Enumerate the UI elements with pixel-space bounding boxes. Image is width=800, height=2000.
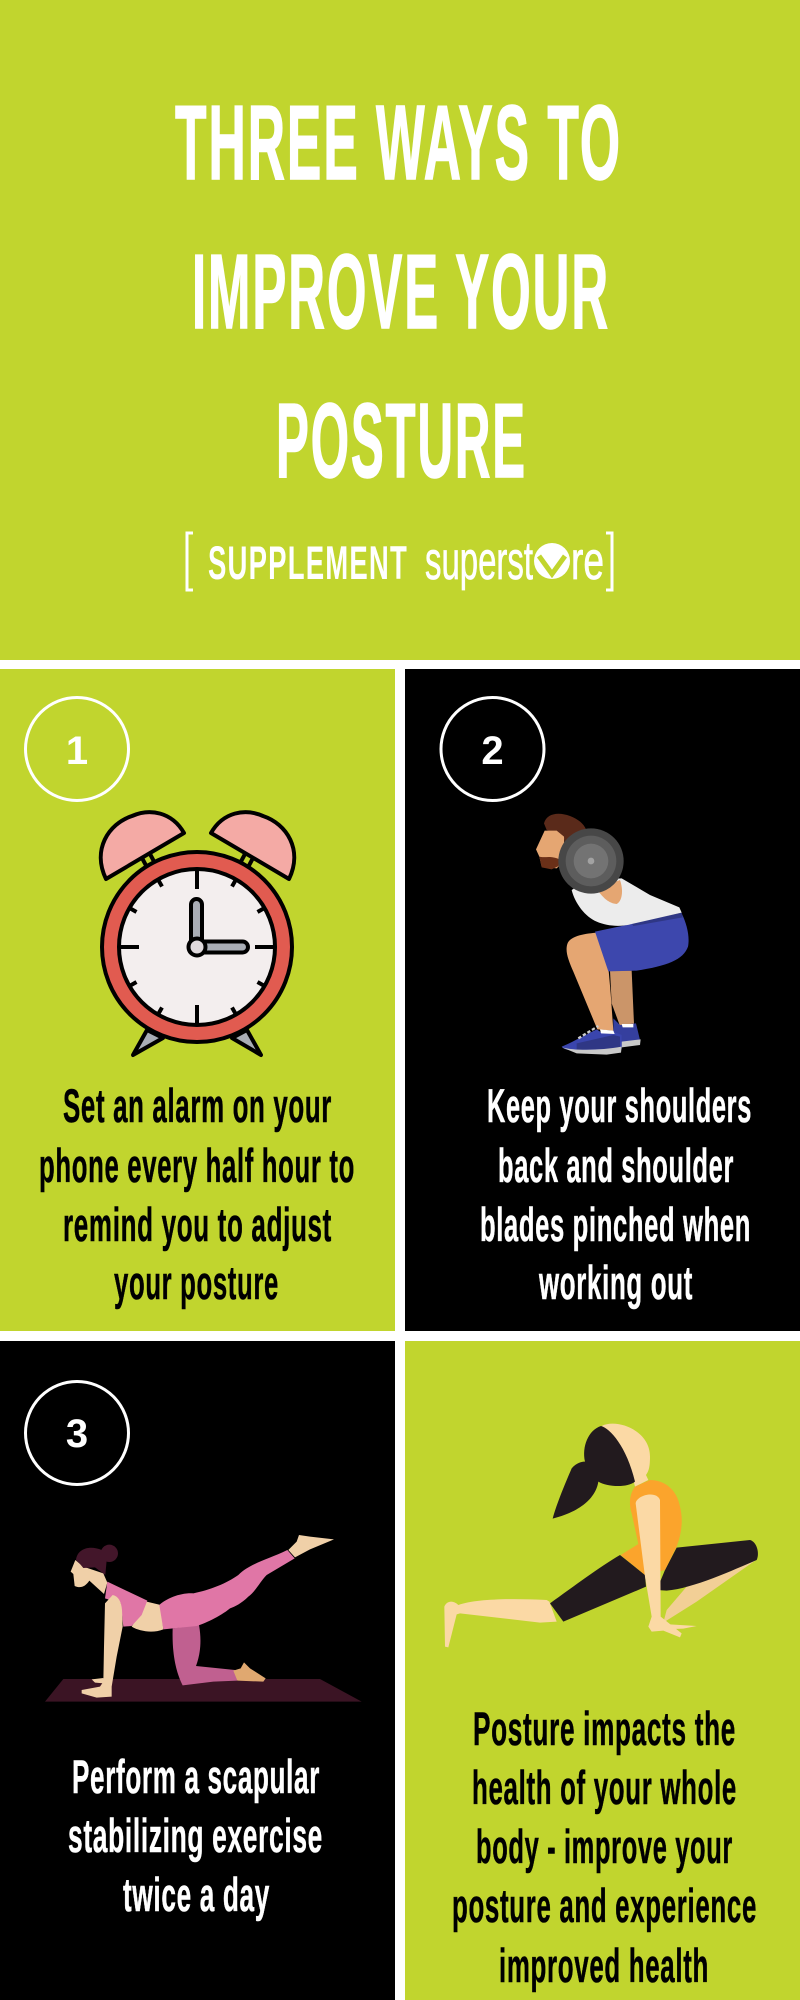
illustration: woman stretching in lunge	[444, 1424, 758, 1647]
text: step 2	[480, 1079, 752, 1309]
text: step 1: remind you to adjust	[63, 1198, 332, 1251]
number badge 3: 3	[66, 1412, 88, 1456]
panel: step 1	[0, 669, 395, 1331]
panel: conclusion	[405, 1341, 800, 2000]
text: step 3: twice a day	[123, 1868, 270, 1921]
panel: step 3	[0, 1341, 395, 2000]
title	[175, 84, 622, 500]
number badge 2: 2	[481, 729, 504, 773]
logo: Supplement Superstore: SUPPLEMENT	[208, 536, 408, 589]
icon: alarm clock	[101, 812, 294, 1055]
number badge 3	[26, 1382, 128, 1484]
text: step 1: your posture	[114, 1256, 279, 1309]
text: step 1	[39, 1079, 355, 1309]
illustration: man squatting with barbell	[536, 814, 689, 1055]
text: step 1: phone every half hour to	[39, 1139, 355, 1192]
logo: Supplement Superstore: superst	[425, 531, 533, 591]
number badge 1: 1	[66, 729, 88, 773]
text: step 1: Set an alarm on your	[63, 1079, 332, 1132]
illustration: woman doing bird dog exercise	[45, 1535, 362, 1702]
text: step 3: stabilizing exercise	[68, 1809, 323, 1862]
panel: step 2	[405, 669, 800, 1331]
number badge 1	[26, 698, 128, 800]
text: conclusion	[452, 1702, 757, 1992]
number badge 2	[441, 698, 544, 800]
text: step 3	[68, 1750, 323, 1921]
logo: Supplement Superstore: re	[571, 531, 604, 591]
text: step 3: Perform a scapular	[72, 1750, 320, 1803]
panel: header	[0, 0, 800, 660]
